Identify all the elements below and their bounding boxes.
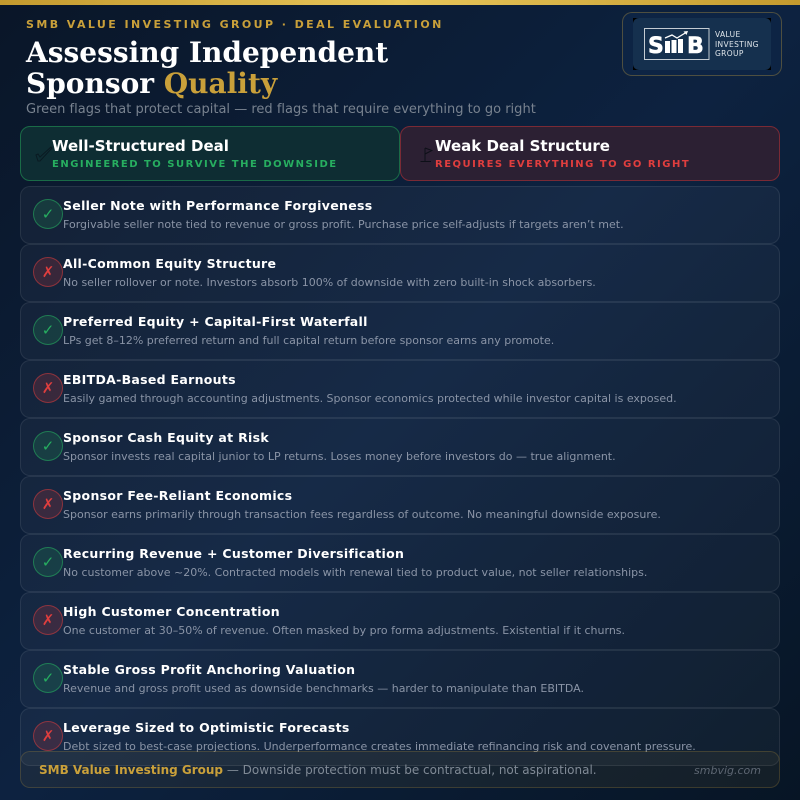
icon: check: ✓: [42, 205, 54, 223]
row: recurring revenue: [20, 534, 780, 592]
icon: cross: [33, 605, 63, 635]
icon: check: ✓: [42, 553, 54, 571]
title: Assessing Independent: [26, 36, 388, 69]
icon: cross: [33, 373, 63, 403]
icon: check: ✓: [42, 437, 54, 455]
row: sponsor cash equity: [20, 418, 780, 476]
title: Sponsor Quality: [26, 67, 277, 100]
icon: cross: ✗: [42, 379, 54, 397]
row title: Leverage Sized to Optimistic Forecasts: [63, 720, 350, 735]
row: preferred equity: [20, 302, 780, 360]
row title: Sponsor Fee-Reliant Economics: [63, 488, 292, 503]
logo tagline: GROUP: [715, 49, 744, 58]
top gold bar: [0, 0, 800, 5]
row title: Seller Note with Performance Forgiveness: [63, 198, 372, 213]
footer message: SMB Value Investing Group — Downside protection must be contractual, not aspirational.: [39, 763, 597, 777]
icon: check: [33, 547, 63, 577]
icon: check: [33, 315, 63, 345]
logo badge: [622, 12, 782, 76]
row description: One customer at 30–50% of revenue. Often masked by pro forma adjustments. Existential if it churns.: [63, 624, 625, 637]
row title: Sponsor Cash Equity at Risk: [63, 430, 269, 445]
icon: check: [33, 199, 63, 229]
heading: Weak Deal Structure: [435, 137, 610, 155]
heading: Well-Structured Deal: [52, 137, 229, 155]
row: stable gross profit: [20, 650, 780, 708]
subheading: ENGINEERED TO SURVIVE THE DOWNSIDE: [52, 159, 338, 170]
logo wordmark: B: [687, 34, 704, 59]
panel header: weak deal structure: [400, 126, 780, 181]
row: all-common equity: [20, 244, 780, 302]
footer bar: [20, 751, 780, 788]
row description: No customer above ~20%. Contracted models with renewal tied to product value, not seller relationships.: [63, 566, 647, 579]
row title: EBITDA-Based Earnouts: [63, 372, 236, 387]
logo wordmark: [644, 28, 710, 60]
icon: check: ✓: [42, 669, 54, 687]
row: fee-reliant economics: [20, 476, 780, 534]
eyebrow label: SMB VALUE INVESTING GROUP · DEAL EVALUATION: [26, 18, 444, 31]
row title: All-Common Equity Structure: [63, 256, 276, 271]
row title: Stable Gross Profit Anchoring Valuation: [63, 662, 355, 677]
subtitle: Green flags that protect capital — red flags that require everything to go right: [26, 102, 536, 117]
row: customer concentration: [20, 592, 780, 650]
row title: High Customer Concentration: [63, 604, 280, 619]
logo plate: [633, 18, 771, 70]
icon: check: ✓: [42, 321, 54, 339]
row: EBITDA earnouts: [20, 360, 780, 418]
row title: Preferred Equity + Capital-First Waterfall: [63, 314, 368, 329]
icon: cross: [33, 257, 63, 287]
icon: check: [33, 431, 63, 461]
icon: cross: [33, 721, 63, 751]
panel header: well-structured deal: [20, 126, 400, 181]
row: seller note: [20, 186, 780, 244]
logo tagline: INVESTING: [715, 40, 759, 48]
logo tagline: [715, 30, 759, 58]
row title: Recurring Revenue + Customer Diversification: [63, 546, 404, 561]
subheading: REQUIRES EVERYTHING TO GO RIGHT: [435, 159, 690, 170]
icon: cross: ✗: [42, 263, 54, 281]
row description: No seller rollover or note. Investors absorb 100% of downside with zero built-in shock absorbers.: [63, 276, 596, 289]
icon: flag: [420, 148, 433, 162]
row description: Sponsor invests real capital junior to LP returns. Loses money before investors do — true alignment.: [63, 450, 616, 463]
icon: cross: ✗: [42, 495, 54, 513]
footer url: smbvig.com: [694, 764, 761, 777]
icon: check: [33, 663, 63, 693]
row: leverage: [20, 708, 780, 766]
icon: check mark: [36, 146, 52, 162]
logo tagline: VALUE: [715, 30, 741, 39]
logo wordmark: S: [648, 34, 664, 59]
row description: Revenue and gross profit used as downside benchmarks — harder to manipulate than EBITDA.: [63, 682, 584, 695]
title: [26, 36, 388, 100]
row description: Sponsor earns primarily through transaction fees regardless of outcome. No meaningful downside exposure.: [63, 508, 661, 521]
row description: Easily gamed through accounting adjustments. Sponsor economics protected while investor capital is exposed.: [63, 392, 677, 405]
row description: Debt sized to best-case projections. Underperformance creates immediate refinancing risk and covenant pressure.: [63, 740, 696, 753]
icon: cross: [33, 489, 63, 519]
icon: cross: ✗: [42, 611, 54, 629]
row description: LPs get 8–12% preferred return and full capital return before sponsor earns any promote.: [63, 334, 554, 347]
icon: cross: ✗: [42, 727, 54, 745]
row description: Forgivable seller note tied to revenue or gross profit. Purchase price self-adjusts if targets aren’t met.: [63, 218, 624, 231]
